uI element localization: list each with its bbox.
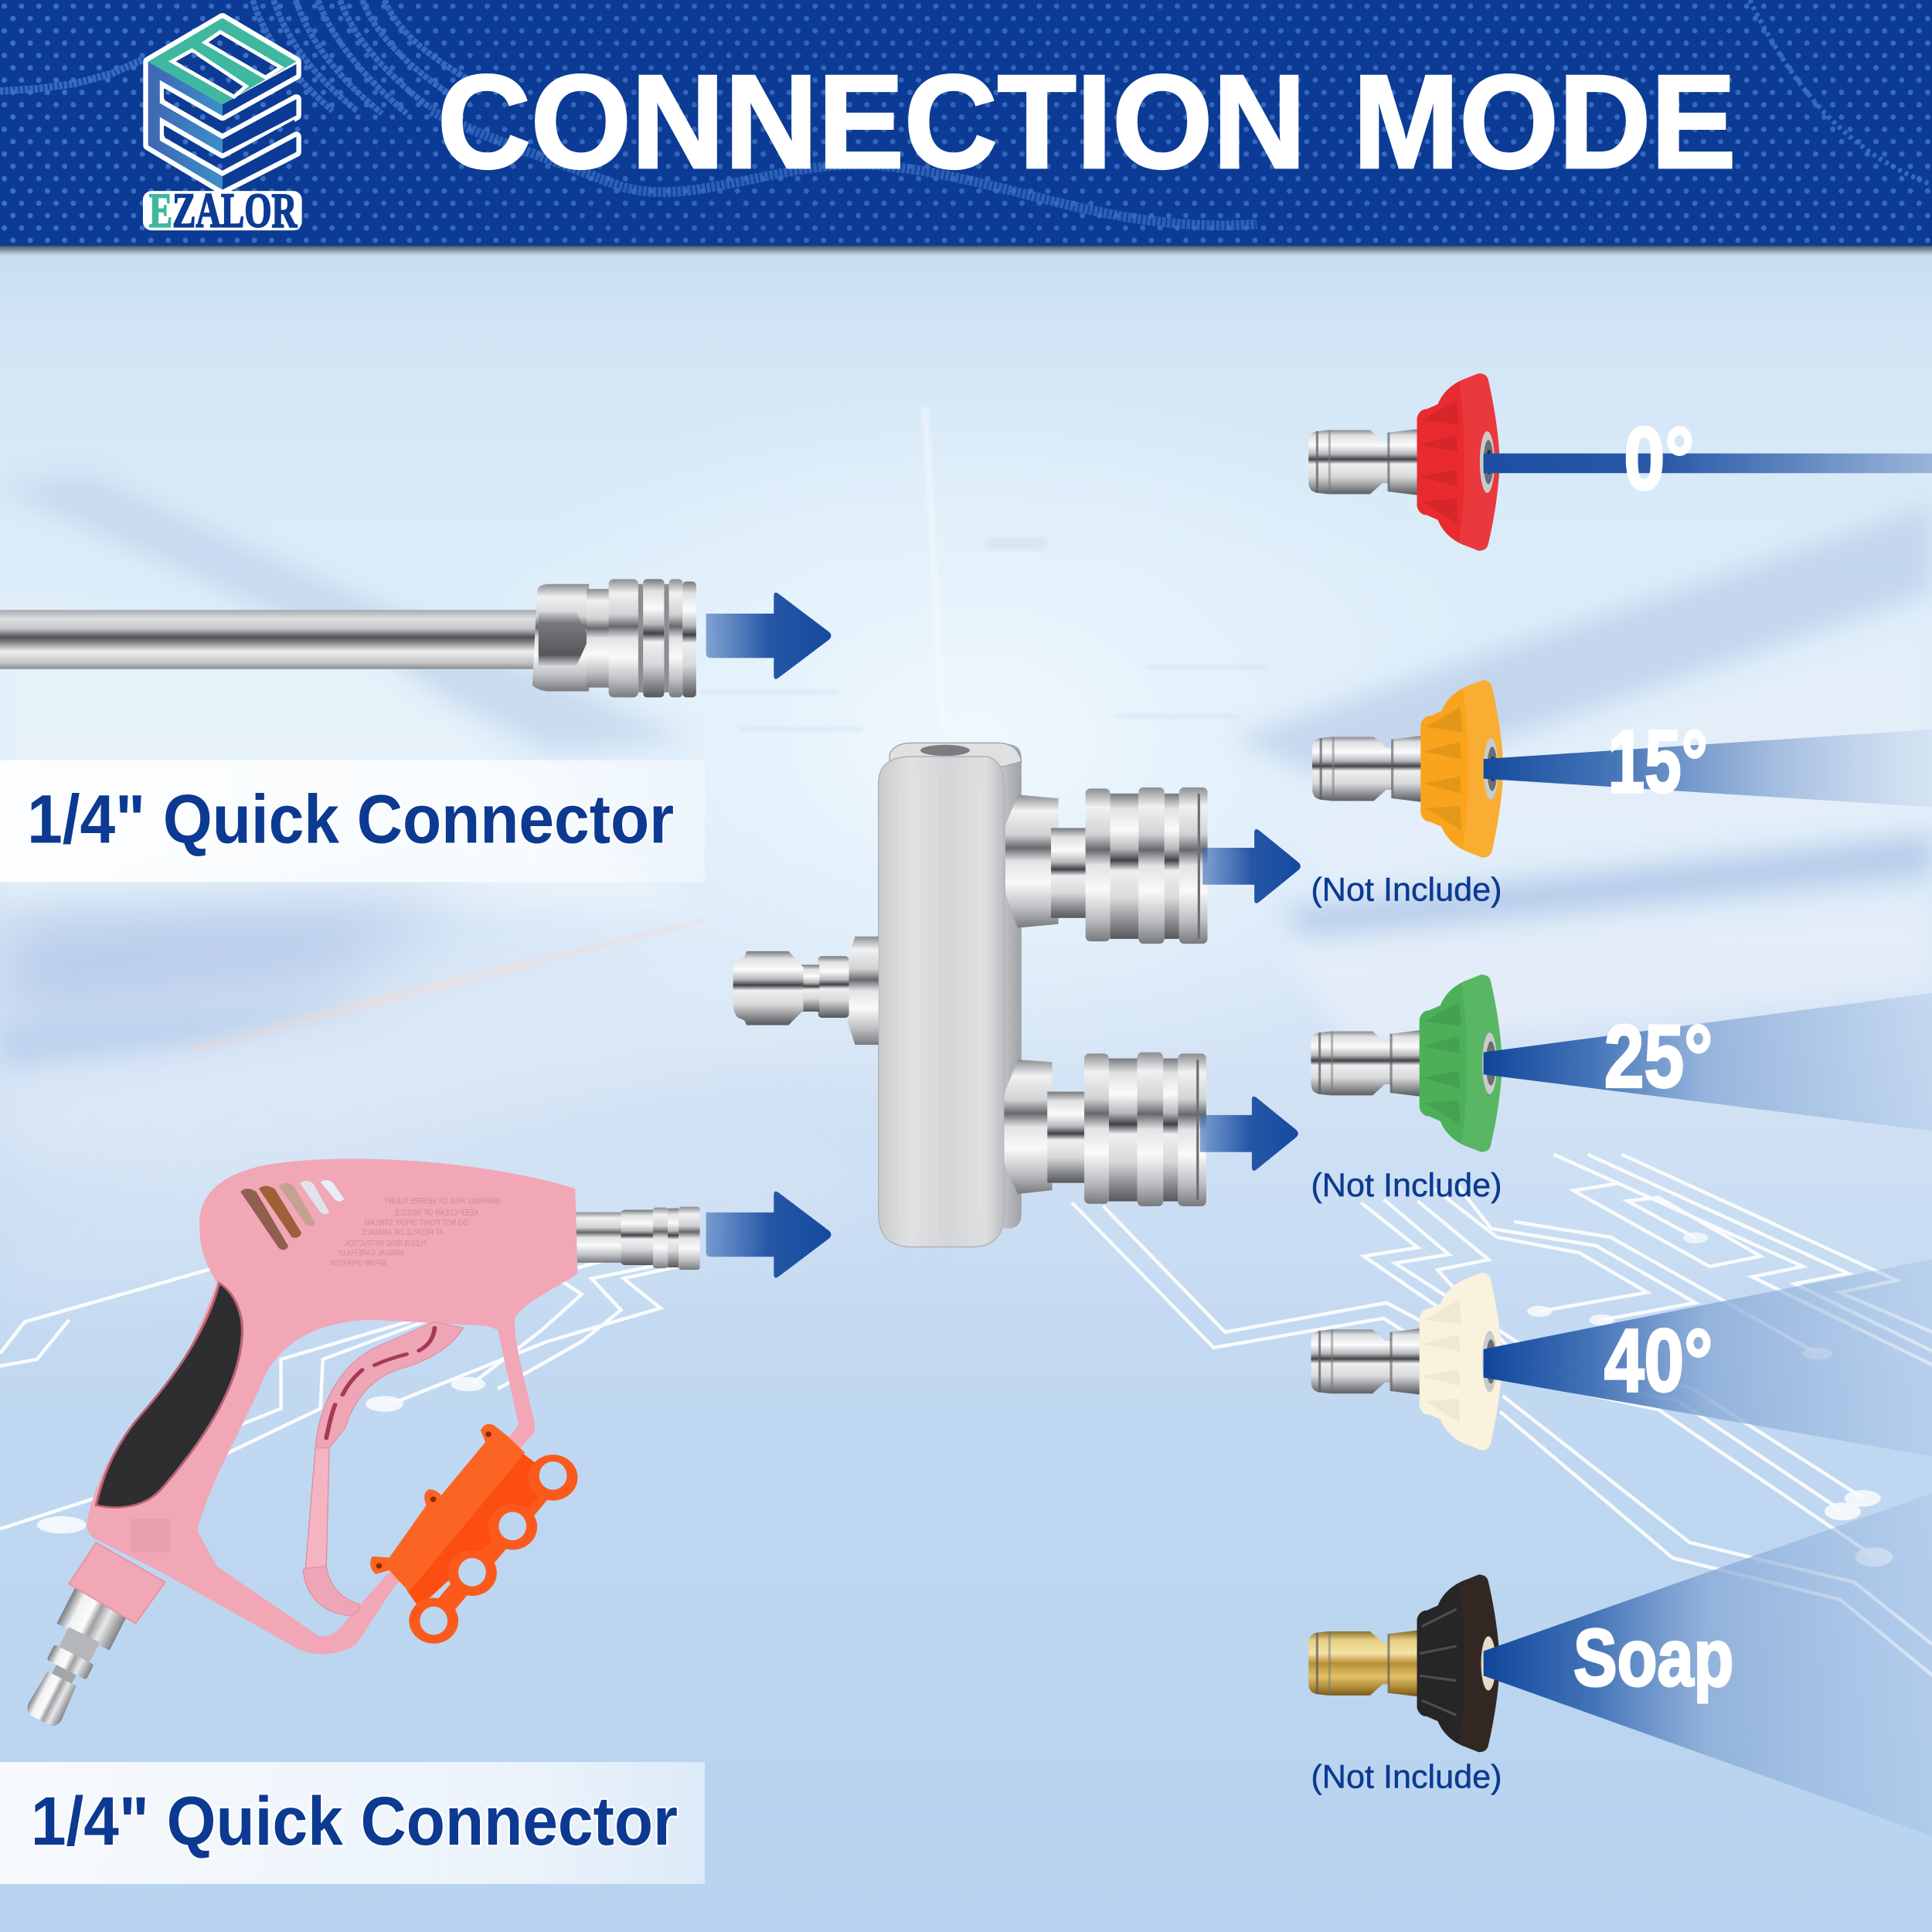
header banner [0,0,1932,247]
title: CONNECTION [437,48,1306,196]
blue band left [0,998,369,1067]
yellow nozzle orifice [1484,738,1498,800]
gun warning text: AT PEOPLE OR ANIMALS [362,1227,444,1237]
plug tip [24,1670,78,1729]
gun pink collar [69,1543,165,1624]
white 40 degree nozzle [1311,1273,1502,1451]
manifold back plate [897,744,1022,1229]
black nozzle cap [1417,1575,1499,1752]
pink spray gun [69,1158,700,1654]
upper hex [1005,794,1059,928]
gun warning text: PLEASE READ INSTRUCTION [345,1239,427,1248]
yellow nozzle stem [1312,736,1423,802]
green 25 degree nozzle [1311,975,1502,1152]
gun vents [240,1180,344,1250]
orange nozzle holder [370,1424,577,1644]
logo: Ezalor cube mark [148,18,296,190]
plug tip [733,951,804,1026]
angle label 0: 0° [1624,410,1694,509]
note: yellow nozzle not included: (Not Include) [1311,871,1502,908]
angle label 15: 15° [1608,713,1708,811]
upper quick coupler on manifold [1005,787,1207,944]
plug hex [56,1588,128,1651]
peach streak [185,918,707,1053]
yellow nozzle cap [1420,680,1503,858]
spray: soap jet [1484,1493,1932,1836]
plug collar [818,956,849,1018]
title [437,48,1736,196]
red 0 degree nozzle [1308,373,1499,551]
circuit lines: right behind nozzles [1072,1155,1932,1675]
plug hex [848,937,879,1045]
gun warning text: MANUAL CAREFULLY [338,1248,404,1257]
gun warning text: KEEP CLEAR OF NOZZLE [394,1208,478,1217]
gun trigger [303,1321,463,1616]
red nozzle stem [1308,429,1420,495]
upper collar [1051,828,1088,918]
holder top bar [370,1424,525,1592]
angle label 25: 25° [1604,1007,1713,1106]
gun warning text: DO NOT POINT SPRAY STREAM [365,1218,468,1227]
red nozzle cap [1417,373,1499,551]
holder web [434,1478,553,1620]
gun fitting to coupler [574,1206,700,1270]
white nozzle orifice [1482,1331,1497,1393]
black nozzle orifice [1481,1636,1496,1691]
holder lug holes [376,1431,492,1569]
trigger lower plate [305,1448,329,1568]
lower quick coupler on manifold [1004,1053,1206,1206]
holder ring holes [420,1461,566,1635]
gun black grip [96,1283,242,1508]
label soap: Soap [1573,1613,1733,1703]
wand coupler [587,579,696,697]
green nozzle cap [1420,975,1502,1152]
spray: 25 degree jet [1484,993,1932,1131]
upper rings [1086,787,1207,944]
header shadow [0,245,1932,257]
logo wordmark: EZALOR [149,182,298,237]
white nozzle stem [1311,1328,1422,1395]
spray wand with quick connector [0,579,696,697]
holder rings [409,1454,577,1644]
white nozzle cap [1420,1273,1502,1451]
trigger slots [326,1328,434,1438]
black nozzle rib highlights [1420,1609,1457,1715]
logo E cutouts [172,32,281,97]
gun body [87,1158,577,1654]
title: MODE [1353,48,1736,196]
arrow: gun to manifold [706,1192,831,1278]
logo white outline [148,18,296,190]
lower hex [1004,1060,1053,1194]
note: green nozzle not included: (Not Include) [1311,1167,1502,1204]
red nozzle orifice [1480,431,1495,493]
brushed texture [900,770,980,1238]
green nozzle stem [1311,1030,1422,1097]
wand hex nut [532,584,589,691]
label band: wand quick connector: 1/4" Quick Connector [27,781,674,858]
green nozzle orifice [1482,1032,1497,1094]
gun warning text: WARNING: RISK OF SEVERE INJURY [384,1196,500,1206]
yellow 15 degree nozzle [1312,680,1503,858]
note: soap nozzle not included: (Not Include) [1311,1758,1502,1795]
arrow: wand to manifold [706,593,831,679]
black soap nozzle [1308,1575,1499,1752]
spray: 15 degree jet [1484,730,1932,807]
label band: gun quick connector: 1/4" Quick Connector [31,1782,678,1859]
gun label plate [131,1519,170,1553]
manifold brushed face [879,757,1004,1247]
manifold top port [889,743,1022,767]
gun lower quick plug [14,1588,128,1734]
label band: gun quick connector [0,1762,705,1884]
gun warning text: BEFORE OPERATION [330,1258,387,1268]
arrow: upper coupler outlet [1202,829,1301,903]
arrow: lower coupler outlet [1200,1097,1298,1171]
lower collar [1047,1092,1087,1183]
circuit lines: left behind gun [0,1255,695,1533]
spray: 0 degree jet [1484,454,1932,473]
logo green top [148,18,296,104]
black nozzle stem [1308,1630,1420,1696]
plug neck [52,1665,77,1684]
gun warning text [330,1196,500,1268]
logo gaps showing banner [164,83,294,170]
plug thread [58,1627,100,1665]
label band: wand quick connector [0,760,705,883]
holder lower body [406,1454,543,1607]
logo dark right arms [223,64,296,190]
plug neck [801,964,819,1012]
lower rings [1084,1053,1206,1206]
plug nut [46,1645,94,1680]
logo blue side [148,62,223,190]
inlet plug on manifold [733,937,879,1045]
spray: 40 degree jet [1484,1259,1932,1457]
angle label 40: 40° [1604,1311,1713,1410]
manifold block [879,743,1022,1247]
wand tube [0,610,537,669]
